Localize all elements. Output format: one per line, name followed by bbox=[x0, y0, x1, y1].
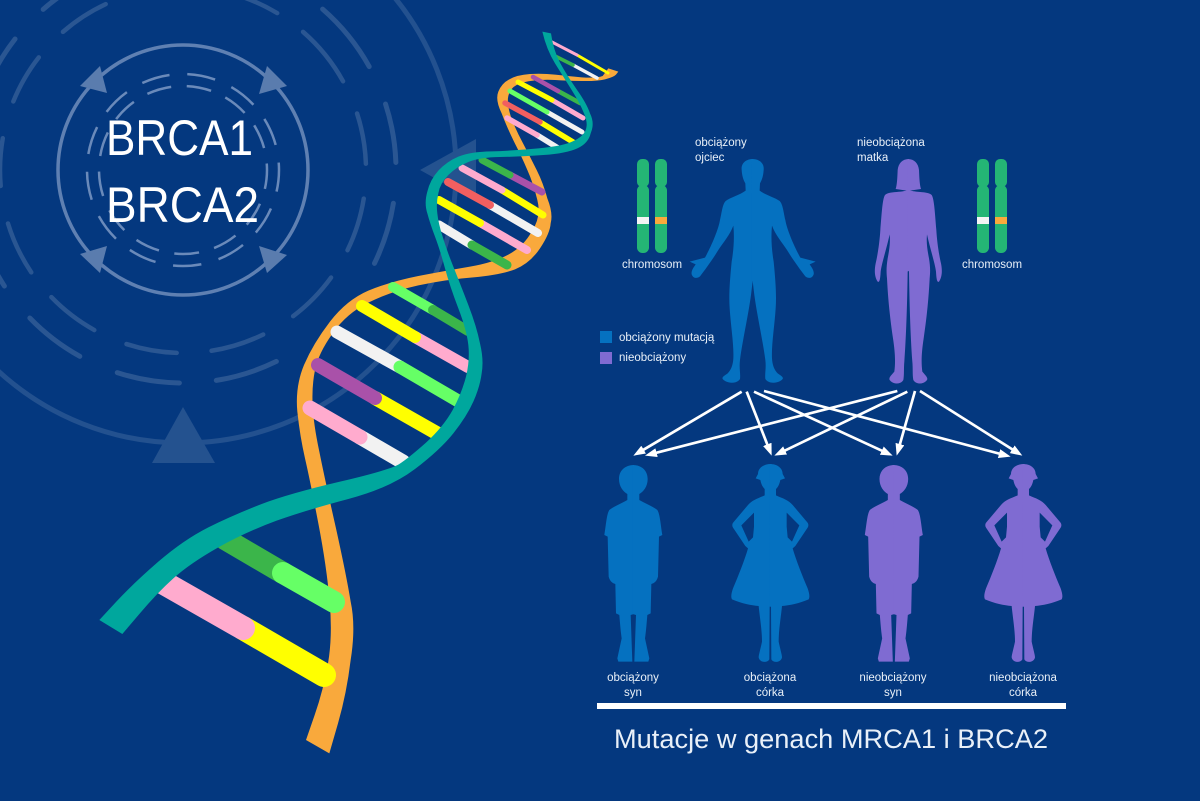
teal strand bbox=[99, 32, 593, 634]
title: BRCA2: BRCA2 bbox=[106, 177, 259, 233]
orange strand bbox=[297, 68, 618, 753]
BRCA emblem: ring with arrowheads bbox=[58, 45, 308, 295]
label: unaffected son: syn bbox=[884, 687, 902, 699]
label: father: obciążony bbox=[695, 137, 747, 149]
figure: unaffected son bbox=[865, 465, 923, 662]
figure: affected son bbox=[604, 465, 662, 662]
chromosome pair: mother bbox=[977, 159, 1007, 253]
caption: Mutacje w genach MRCA1 i BRCA2 bbox=[614, 724, 1048, 754]
legend: nieobciążony bbox=[619, 352, 686, 364]
background concentric rings bbox=[0, 0, 476, 463]
title: BRCA1: BRCA1 bbox=[106, 110, 253, 166]
label: unaffected daughter: córka bbox=[1009, 687, 1038, 699]
figure: mother bbox=[875, 159, 942, 384]
caption rule bbox=[597, 703, 1066, 709]
figure: affected daughter bbox=[731, 464, 809, 662]
label: chromosome mother: chromosom bbox=[962, 259, 1022, 271]
label: father: ojciec bbox=[695, 152, 725, 164]
DNA double helix bbox=[99, 32, 618, 753]
legend bbox=[600, 331, 715, 364]
figure: father bbox=[690, 159, 816, 383]
label: affected daughter: obciążona bbox=[744, 672, 797, 684]
label: affected son: syn bbox=[624, 687, 642, 699]
label: mother: matka bbox=[857, 152, 889, 164]
chromosome pair: father bbox=[637, 159, 667, 253]
figure: unaffected daughter bbox=[984, 464, 1062, 662]
label: unaffected son: nieobciążony bbox=[859, 672, 927, 684]
label: unaffected daughter: nieobciążona bbox=[989, 672, 1057, 684]
label: mother: nieobciążona bbox=[857, 137, 925, 149]
label: affected son: obciążony bbox=[607, 672, 659, 684]
inheritance arrows bbox=[638, 391, 1017, 455]
label: affected daughter: córka bbox=[756, 687, 785, 699]
base-pair rungs bbox=[164, 41, 608, 675]
legend: obciążony mutacją bbox=[619, 332, 715, 344]
label: chromosome father: chromosom bbox=[622, 259, 682, 271]
